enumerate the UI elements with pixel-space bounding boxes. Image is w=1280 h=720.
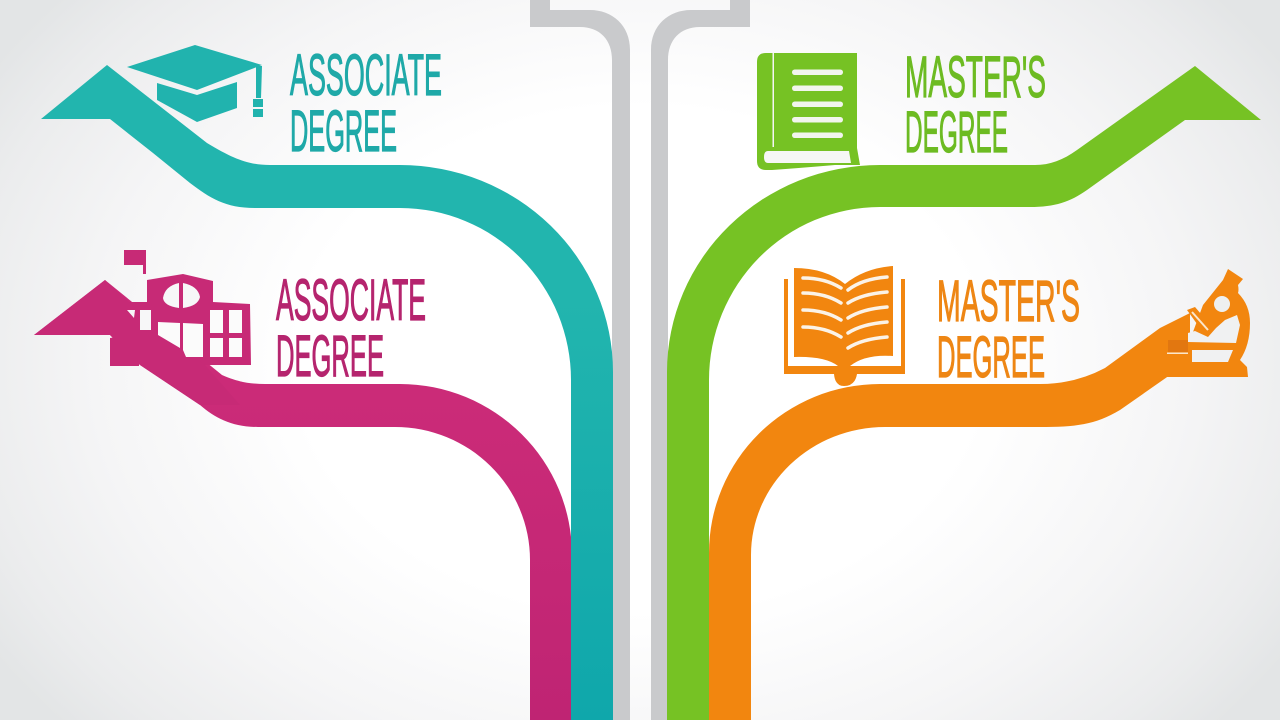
orange ribbon arrow bbox=[709, 313, 1190, 720]
text: associate degree (magenta): DEGREE bbox=[276, 324, 384, 389]
gray centre road, left branch bbox=[530, 0, 630, 720]
text: MASTER'S bbox=[905, 45, 1046, 110]
icon: school building bbox=[34, 250, 251, 405]
text: master's degree (green): DEGREE bbox=[905, 100, 1008, 165]
text: master's degree (orange) bbox=[937, 269, 1080, 390]
gray centre road, right branch bbox=[651, 0, 750, 720]
text: ASSOCIATE bbox=[276, 268, 426, 333]
icon: microscope bbox=[1167, 269, 1250, 377]
icon: closed book bbox=[757, 53, 860, 170]
icon: open book bbox=[784, 266, 905, 386]
text: ASSOCIATE bbox=[290, 43, 442, 108]
text: MASTER'S bbox=[937, 269, 1080, 334]
text: associate degree (teal): DEGREE bbox=[290, 99, 397, 164]
text: associate degree (magenta) bbox=[276, 268, 426, 389]
teal ribbon arrow bbox=[41, 65, 613, 720]
green ribbon arrow bbox=[667, 66, 1261, 720]
magenta ribbon arrow bbox=[34, 280, 572, 720]
text: master's degree (orange): DEGREE bbox=[937, 325, 1045, 390]
text: associate degree (teal) bbox=[290, 43, 442, 164]
text: master's degree (green) bbox=[905, 45, 1046, 165]
icon: graduation cap bbox=[127, 45, 263, 122]
